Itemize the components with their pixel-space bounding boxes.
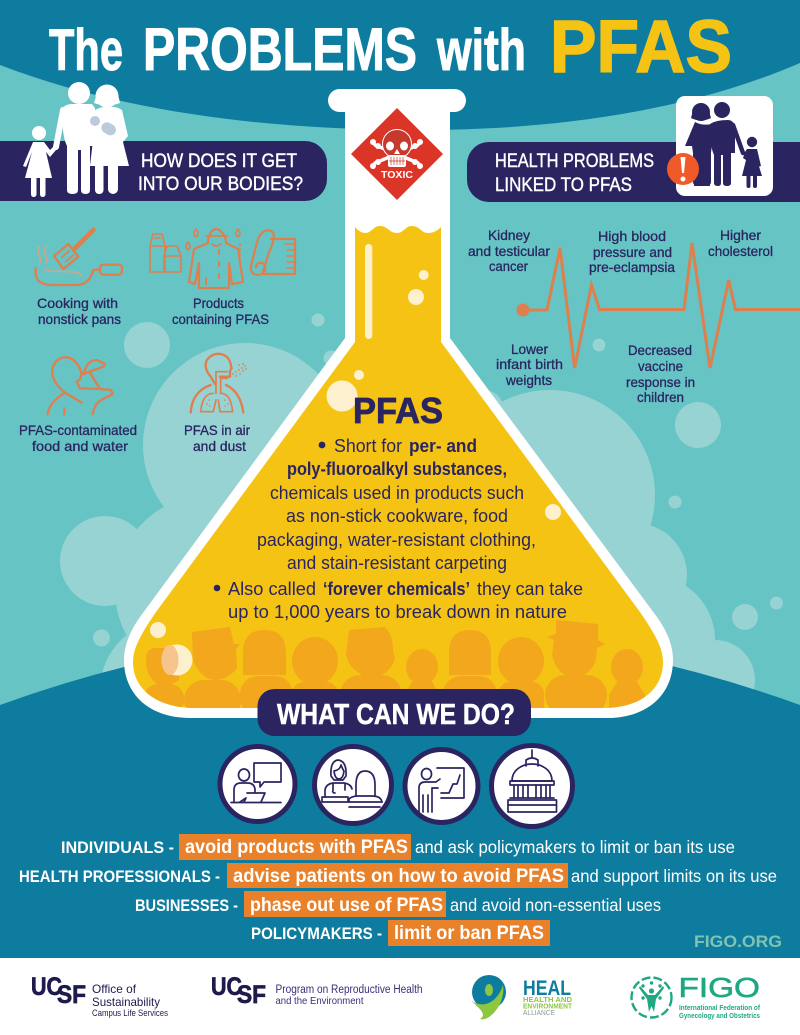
text: higher cholesterol: Higher: [720, 227, 761, 243]
text: high blood pressure and pre-eclampsia: High blood: [598, 228, 666, 244]
heading: PFAS in flask: PFAS: [353, 390, 443, 431]
text: kidney and testicular cancer: cancer: [489, 258, 528, 274]
text block: PFAS definition: ‘forever chemicals’: [323, 579, 470, 599]
text: lower infant birth weights: infant birth: [496, 356, 563, 372]
panel: how does it get into our bodies banner: HOW DOES IT GET: [141, 150, 297, 172]
action line: individuals: avoid products with PFAS: [185, 837, 408, 858]
text: higher cholesterol: cholesterol: [708, 243, 773, 259]
text: PFAS in air and dust: and dust: [193, 438, 246, 454]
icon: family card with warning: [667, 96, 773, 196]
logo: UCSF program on reproductive health: [211, 973, 422, 1009]
text: kidney and testicular cancer: [468, 227, 550, 274]
text: products containing PFAS: Products: [193, 295, 244, 311]
logo: UCSF office of sustainability: [31, 973, 168, 1018]
text: kidney and testicular cancer: and testicular: [468, 243, 550, 259]
logo: HEAL alliance: ALLIANCE: [523, 1010, 555, 1017]
logo: FIGO: Gynecology and Obstetrics: [679, 1011, 760, 1020]
logo: FIGO: FIGO: [678, 972, 760, 1003]
icon: pan with spatula: [36, 230, 122, 285]
panel: health problems banner: HEALTH PROBLEMS: [495, 150, 654, 172]
logo: UCSF program on reproductive health: SF: [237, 981, 266, 1009]
heading: what can we do: WHAT CAN WE DO?: [277, 699, 515, 731]
background: pale clouds and bubbles: [60, 314, 783, 760]
title: with: [436, 18, 526, 83]
logo: HEAL alliance: HEALTH AND: [523, 997, 572, 1004]
text: cooking with nonstick pans: [37, 295, 121, 327]
logo: UCSF program on reproductive health: and the Environment: [276, 996, 364, 1007]
action line: businesses: [135, 891, 661, 917]
heading: what can we do: [258, 689, 531, 736]
text: cooking with nonstick pans: Cooking with: [37, 295, 118, 311]
action line: health professionals: [19, 863, 777, 888]
title: The: [49, 18, 123, 83]
logo: FIGO: International Federation of: [679, 1003, 760, 1012]
logo: HEAL alliance: ENVIRONMENT: [523, 1004, 573, 1010]
text: products containing PFAS: containing PFAS: [172, 311, 269, 327]
action line: policymakers: POLICYMAKERS -: [251, 924, 382, 943]
text: PFAS in air and dust: [184, 422, 250, 454]
logo: UCSF office of sustainability: Office of: [92, 982, 137, 996]
text block: PFAS definition: as non-stick cookware, food: [286, 506, 508, 526]
icon: toxic diamond: TOXIC: [381, 169, 413, 181]
title: PFAS: [550, 5, 732, 88]
icon: capitol building: [492, 746, 572, 826]
flask: crowd silhouettes: [146, 620, 645, 708]
text: decreased vaccine response in children: vaccine: [638, 358, 683, 374]
panel: how does it get into our bodies banner: INTO OUR BODIES?: [138, 173, 303, 195]
text block: PFAS definition: poly-fluoroalkyl substances,: [287, 459, 507, 479]
flask: yellow liquid: [133, 226, 663, 708]
panel: health problems banner: [467, 142, 800, 202]
text: decreased vaccine response in children: [626, 342, 695, 405]
text: products containing PFAS: [172, 295, 269, 327]
action line: individuals: [61, 834, 735, 860]
text: high blood pressure and pre-eclampsia: [589, 228, 675, 275]
text block: PFAS definition: packaging, water-resistant clothing,: [257, 530, 536, 550]
icon: individual at laptop: [220, 746, 295, 822]
action line: businesses: and avoid non-essential uses: [450, 895, 661, 915]
text block: PFAS definition: up to 1,000 years to break down in nature: [228, 602, 567, 622]
icon: toxic diamond: [351, 108, 443, 200]
text block: PFAS definition: they can take: [477, 579, 583, 599]
text: kidney and testicular cancer: Kidney: [488, 227, 530, 243]
text: cooking with nonstick pans: nonstick pans: [38, 311, 121, 327]
text: PFAS contaminated food and water: PFAS-contaminated: [19, 422, 137, 438]
flask: overlap tint on bubble: [162, 645, 178, 675]
logo: UCSF office of sustainability: SF: [57, 981, 86, 1009]
chart: heartbeat line: [516, 243, 800, 368]
action line: policymakers: limit or ban PFAS: [394, 923, 544, 944]
action line: individuals: INDIVIDUALS -: [61, 838, 174, 857]
action line: health professionals: advise patients on how to avoid PFAS: [233, 866, 564, 887]
logo: HEAL alliance: [471, 975, 573, 1019]
text: PFAS in air and dust: PFAS in air: [184, 422, 250, 438]
background: dark top band: [0, 0, 800, 130]
text: PFAS contaminated food and water: food and water: [32, 438, 128, 454]
action line: health professionals: and support limits on its use: [571, 866, 777, 886]
icon: lungs with dust: [191, 354, 247, 413]
title: [49, 5, 732, 88]
action line: health professionals: HEALTH PROFESSIONALS -: [19, 867, 220, 886]
logo: UCSF office of sustainability: Sustainability: [92, 995, 160, 1009]
text: figo.org: FIGO.ORG: [694, 933, 782, 951]
icon: health professional with patient: [314, 746, 392, 824]
flask: cream bubbles: [150, 244, 561, 676]
text: higher cholesterol: [708, 227, 773, 259]
logo: UCSF program on reproductive health: UC: [211, 973, 242, 1001]
icon: white family with baby: [23, 82, 129, 197]
panel: how does it get into our bodies banner: [0, 141, 327, 201]
icon: products containing PFAS: [150, 229, 295, 288]
text: lower infant birth weights: weights: [505, 372, 552, 388]
text: decreased vaccine response in children: Decreased: [628, 342, 692, 358]
logo: HEAL alliance: HEAL: [523, 977, 571, 1000]
text block: PFAS definition: chemicals used in products such: [270, 483, 524, 503]
icon: person drinking water: [48, 357, 113, 414]
action line: businesses: phase out use of PFAS: [250, 895, 443, 916]
footer band: [0, 958, 800, 1035]
text: high blood pressure and pre-eclampsia: pre-eclampsia: [589, 259, 675, 275]
text block: PFAS definition: Short for: [334, 436, 402, 456]
flask: white outline: [124, 89, 673, 718]
title: PROBLEMS: [143, 16, 417, 83]
panel: health problems banner: LINKED TO PFAS: [495, 174, 632, 196]
text: decreased vaccine response in children: response in: [626, 374, 695, 390]
text: lower infant birth weights: Lower: [511, 341, 548, 357]
action line: policymakers: [251, 920, 550, 946]
text: PFAS contaminated food and water: [19, 422, 137, 454]
text block: PFAS definition: per- and: [409, 436, 477, 456]
text: lower infant birth weights: [496, 341, 563, 388]
text block: PFAS definition: Also called: [228, 579, 316, 599]
action line: individuals: and ask policymakers to limit or ban its use: [415, 837, 735, 857]
background: dark bottom band: [0, 632, 800, 958]
text block: PFAS definition: and stain-resistant carpeting: [287, 553, 507, 573]
logo: FIGO: [632, 972, 760, 1020]
text: high blood pressure and pre-eclampsia: pressure and: [593, 244, 672, 260]
text block: PFAS definition: [214, 436, 583, 622]
logo: UCSF program on reproductive health: Program on Reproductive Health: [276, 984, 422, 996]
text: decreased vaccine response in children: children: [637, 389, 684, 405]
action line: businesses: BUSINESSES -: [135, 896, 238, 915]
icon: business presenter with chart: [405, 750, 478, 822]
logo: UCSF office of sustainability: UC: [31, 973, 62, 1001]
logo: UCSF office of sustainability: Campus Life Services: [92, 1008, 168, 1018]
